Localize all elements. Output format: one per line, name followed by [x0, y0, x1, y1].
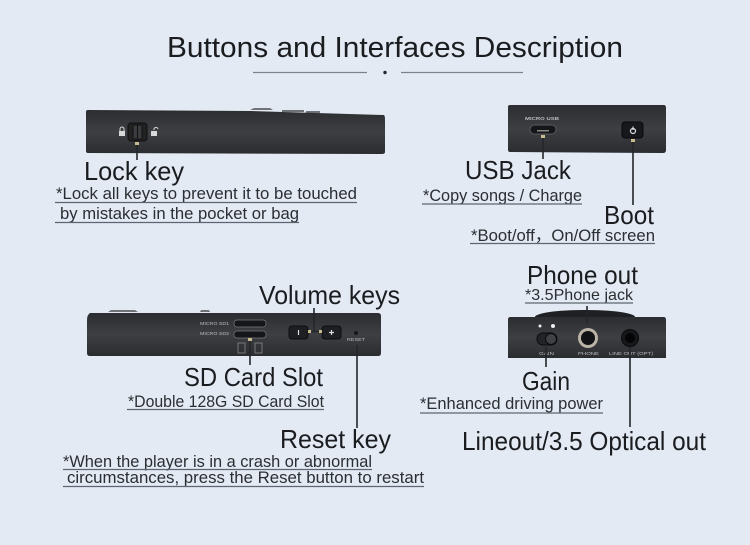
text: usb description: *Copy songs / Charge — [423, 186, 582, 205]
device: end view with USB and power — [508, 105, 666, 153]
heading: boot: Boot — [604, 200, 655, 230]
panel: lock key — [55, 108, 385, 223]
text: gain description: *Enhanced driving power — [420, 394, 603, 413]
device: side view with lock switch — [86, 108, 385, 154]
panel: volume, sd card, reset — [63, 280, 424, 487]
text: lock key description — [55, 184, 357, 223]
heading: gain: Gain — [522, 366, 570, 396]
text: reset description: *When the player is in a crash or abnormal — [63, 452, 372, 471]
pointer line: usb jack — [542, 138, 544, 159]
device: end view with jacks: GAIN — [539, 351, 554, 356]
device: end view with jacks: PHONE — [578, 351, 599, 356]
text: reset description — [63, 452, 424, 487]
heading: lineout: Lineout/3.5 Optical out — [462, 426, 707, 456]
pointer line: boot — [632, 142, 634, 205]
heading: volume keys: Volume keys — [259, 280, 400, 310]
pointer line: volume keys — [311, 308, 319, 332]
text: sd card description: *Double 128G SD Card Slot — [128, 392, 324, 411]
text: phone out description: *3.5Phone jack — [525, 287, 634, 304]
text: reset description: circumstances, press the Reset button to restart — [67, 468, 424, 487]
pointer line: reset — [356, 345, 358, 428]
device: end view with jacks — [508, 310, 666, 358]
panel: phone out, gain, lineout — [420, 260, 707, 456]
pointer line: lineout — [629, 347, 631, 427]
pointer line: gain — [545, 347, 547, 367]
device: end view with jacks: LINE OUT (OPT) — [609, 351, 654, 356]
heading: phone out: Phone out — [527, 260, 639, 290]
device: side view with SD slots and volume: RESET — [347, 337, 365, 342]
heading: lock key: Lock key — [84, 156, 184, 186]
heading: usb jack: USB Jack — [465, 155, 572, 185]
panel: usb jack and boot — [422, 105, 666, 245]
device: side view with SD slots and volume: MICRO SD1 — [200, 321, 230, 326]
heading: reset key: Reset key — [280, 424, 391, 454]
device: end view with USB and power: MICRO USB — [525, 116, 560, 121]
text: lock key description: by mistakes in the pocket or bag — [60, 204, 299, 223]
pointer line: phone out — [586, 306, 588, 324]
text: lock key description: *Lock all keys to prevent it to be touched — [56, 184, 357, 203]
device: side view with SD slots and volume: MICRO SD2 — [200, 331, 230, 336]
pointer line: lock key — [136, 145, 138, 160]
pointer line: sd card — [249, 341, 251, 365]
title: Buttons and Interfaces Description — [167, 32, 623, 64]
device: side view with SD slots and volume — [87, 310, 381, 356]
heading: sd card slot: SD Card Slot — [184, 362, 324, 392]
text: boot description: *Boot/off，On/Off screen — [471, 226, 655, 245]
